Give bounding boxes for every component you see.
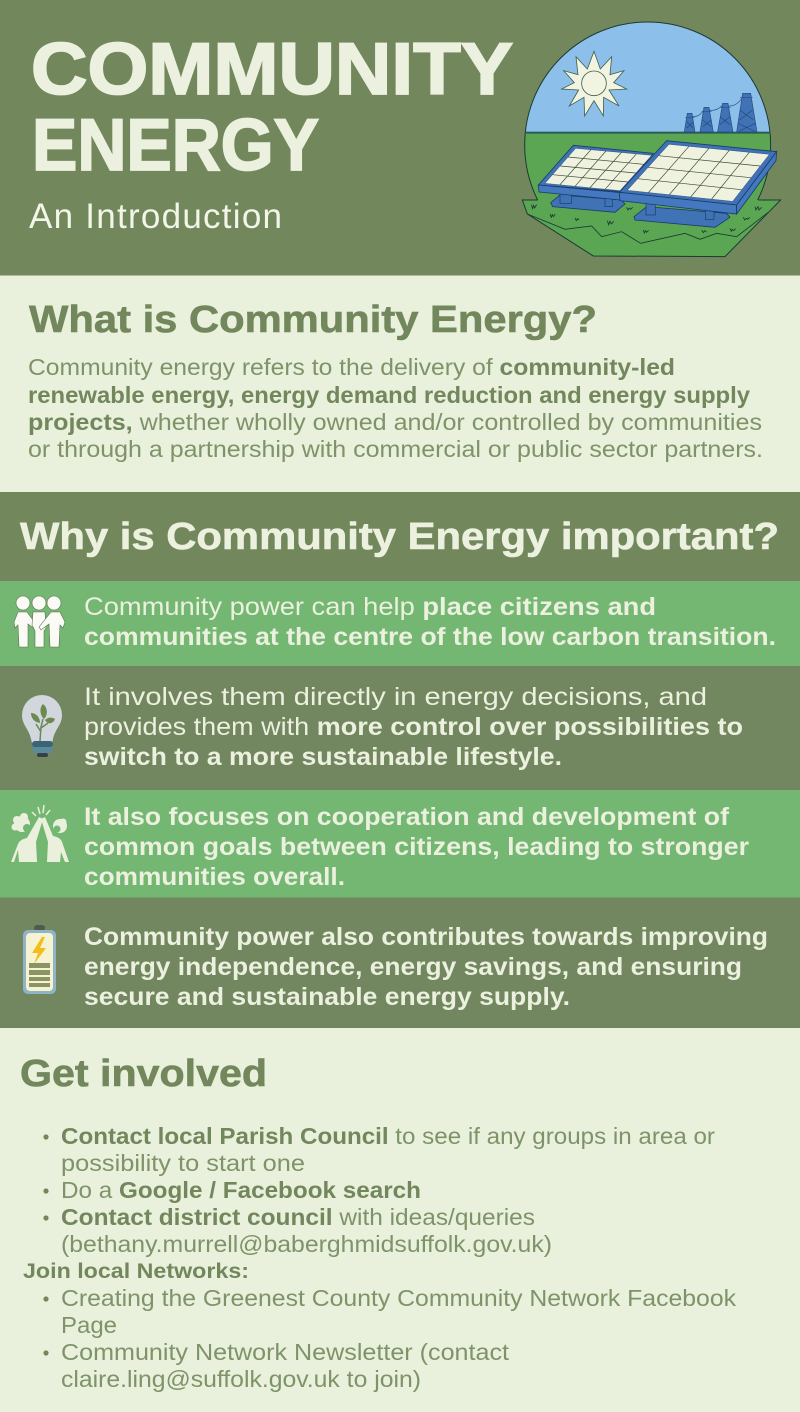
grass tufts: [531, 205, 762, 233]
panel: reason 2: [0, 666, 800, 790]
text: [84, 683, 743, 771]
list: actions: possibility to start one: [61, 1150, 305, 1176]
list: networks: Page: [61, 1312, 117, 1338]
text: It involves them directly in energy decisions, and: [84, 683, 707, 711]
text: [84, 593, 776, 651]
illustration: solar panels in a field: [522, 20, 781, 268]
list: actions: [43, 1123, 715, 1257]
title: COMMUNITY: [31, 29, 513, 110]
text: common goals between citizens, leading to stronger: [84, 833, 749, 861]
panel: why important heading: Why is Community Energy important?: [20, 516, 779, 558]
text: energy independence, energy savings, and ensuring: [84, 953, 742, 981]
panel: reason 3: [0, 790, 800, 898]
pylons: [684, 93, 757, 132]
definition text: [28, 354, 763, 462]
text: [84, 923, 768, 1011]
definition text: or through a partnership with commercial or public sector partners.: [28, 436, 763, 462]
panel: reason 1: [0, 581, 800, 666]
sky: [523, 20, 773, 133]
title: ENERGY: [32, 105, 319, 186]
heading: What is Community Energy?: [29, 299, 597, 341]
text: [84, 803, 749, 891]
title: [31, 29, 513, 186]
list: networks: Creating the Greenest County Community Network Facebook: [61, 1285, 737, 1311]
text: communities overall.: [84, 863, 345, 891]
definition text: renewable energy, energy demand reduction and energy supply: [28, 382, 750, 408]
panel: why important heading: [0, 492, 800, 582]
list: actions: Contact local Parish Council to see if any groups in area or: [61, 1123, 715, 1149]
list: networks: claire.ling@suffolk.gov.uk to join): [61, 1366, 421, 1392]
definition text: projects, whether wholly owned and/or controlled by communities: [28, 409, 762, 435]
sun: [562, 51, 627, 116]
text: communities at the centre of the low carbon transition.: [84, 623, 776, 651]
left solar panel: [538, 145, 653, 212]
text: secure and sustainable energy supply.: [84, 983, 570, 1011]
list: networks: Community Network Newsletter (contact: [61, 1339, 510, 1365]
subheading: Join local Networks:: [23, 1260, 249, 1283]
icon: battery: [23, 925, 56, 994]
icon: light bulb with plant: [22, 695, 62, 757]
definition text: Community energy refers to the delivery of community-led: [28, 354, 675, 380]
subtitle: An Introduction: [29, 197, 282, 236]
list: actions: Contact district council with ideas/queries: [61, 1204, 535, 1230]
text: switch to a more sustainable lifestyle.: [84, 743, 562, 771]
icon: three people: [14, 596, 65, 647]
ground: [522, 200, 781, 257]
panel: what is community energy: [28, 299, 763, 462]
text: It also focuses on cooperation and development of: [84, 803, 730, 831]
list: actions: (bethany.murrell@baberghmidsuffolk.gov.uk): [61, 1231, 552, 1257]
text: Community power can help place citizens and: [84, 593, 656, 621]
list: actions: Do a Google / Facebook search: [61, 1177, 421, 1203]
text: Community power also contributes towards improving: [84, 923, 768, 951]
icon: high five: [11, 805, 69, 862]
list: networks: [43, 1285, 737, 1392]
panel: header: [0, 0, 800, 276]
panel: get involved: [20, 1053, 737, 1392]
heading: Get involved: [20, 1053, 267, 1095]
right solar panel: [619, 141, 777, 227]
text: provides them with more control over possibilities to: [84, 713, 743, 741]
panel: reason 4: [0, 898, 800, 1028]
